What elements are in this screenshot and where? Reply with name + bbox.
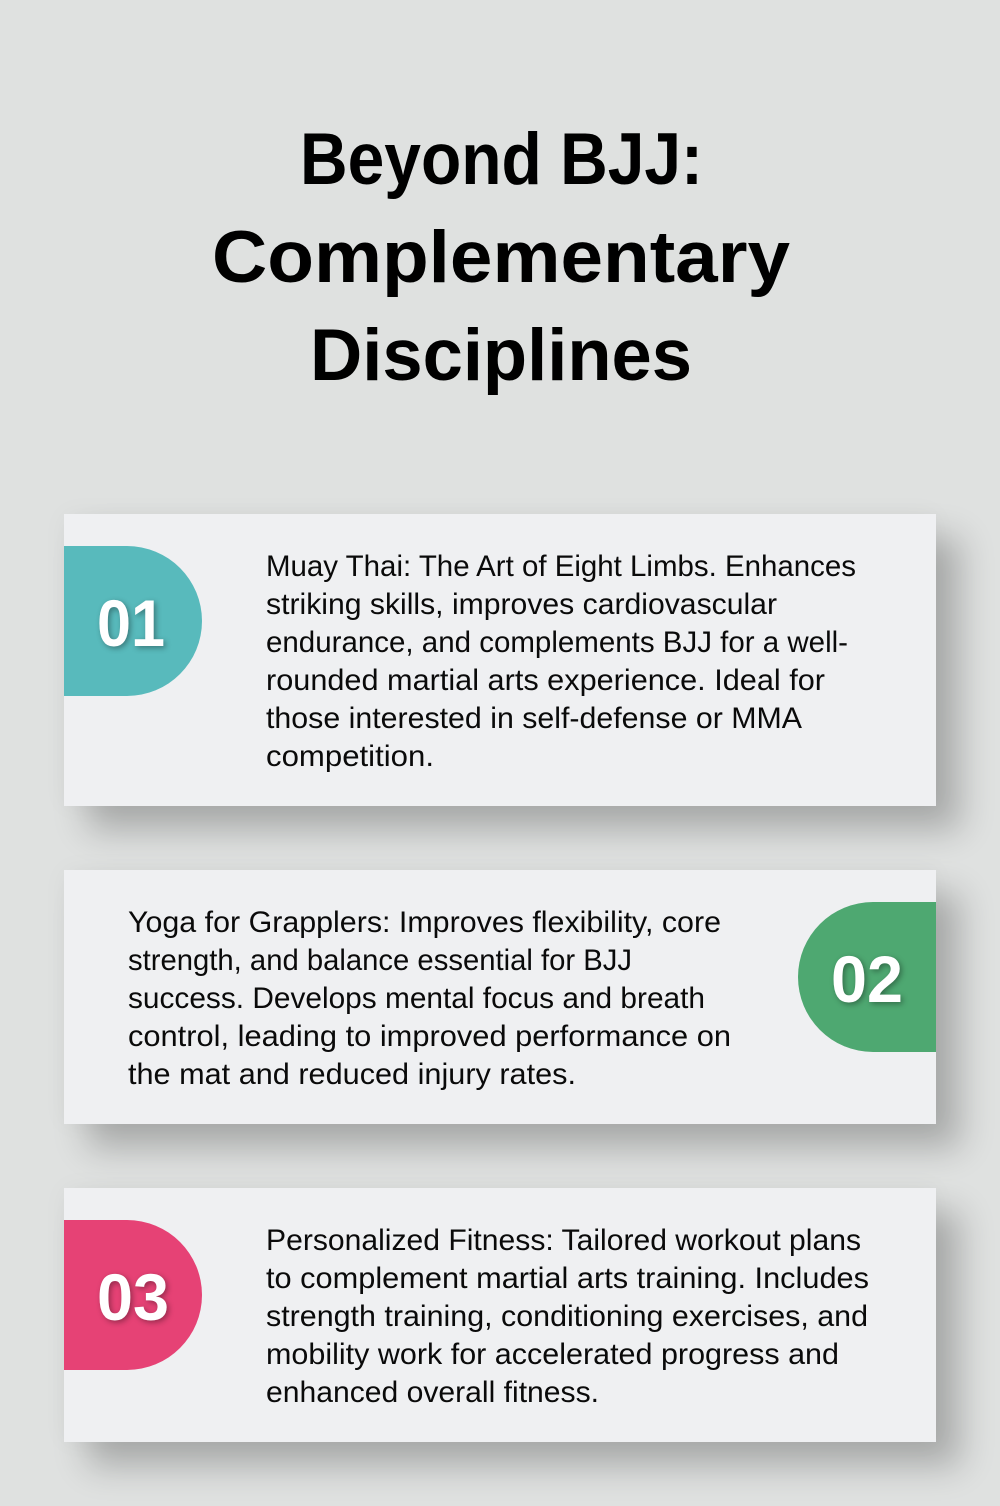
text: Personalized Fitness description: Personalized Fitness: Tailored workout plans: [266, 1224, 861, 1257]
badge: 01: 01: [97, 586, 165, 660]
badge: 02: 02: [831, 942, 903, 1016]
text: Muay Thai description: competition.: [266, 740, 434, 773]
title: Beyond BJJ:: [300, 119, 703, 200]
text: Muay Thai description: rounded martial arts experience. Ideal for: [266, 664, 825, 697]
text: Muay Thai description: Muay Thai: The Art of Eight Limbs. Enhances: [266, 550, 856, 583]
text: Yoga description: [128, 906, 731, 1091]
title: Complementary: [212, 217, 790, 298]
text: Yoga description: control, leading to improved performance on: [128, 1020, 731, 1053]
text: Muay Thai description: those interested in self-defense or MMA: [266, 702, 802, 735]
text: Muay Thai description: striking skills, improves cardiovascular: [266, 588, 777, 621]
title: [212, 119, 790, 396]
text: Muay Thai description: endurance, and complements BJJ for a well-: [266, 626, 848, 659]
badge: 02: [798, 902, 936, 1052]
text: Personalized Fitness description: enhanced overall fitness.: [266, 1376, 599, 1409]
text: Personalized Fitness description: strength training, conditioning exercises, and: [266, 1300, 868, 1333]
badge: 03: 03: [97, 1260, 169, 1334]
text: Yoga description: the mat and reduced injury rates.: [128, 1058, 576, 1091]
badge: 03: [64, 1220, 202, 1370]
text: Personalized Fitness description: to complement martial arts training. Includes: [266, 1262, 869, 1295]
title: Disciplines: [310, 315, 692, 396]
panel: Personalized Fitness: [64, 1188, 936, 1442]
text: Personalized Fitness description: mobility work for accelerated progress and: [266, 1338, 839, 1371]
text: Yoga description: success. Develops mental focus and breath: [128, 982, 705, 1015]
text: Muay Thai description: [266, 550, 856, 773]
text: Yoga description: Yoga for Grapplers: Improves flexibility, core: [128, 906, 721, 939]
text: Personalized Fitness description: [266, 1224, 869, 1409]
badge: 01: [64, 546, 202, 696]
panel: Muay Thai: [64, 514, 936, 806]
text: Yoga description: strength, and balance essential for BJJ: [128, 944, 632, 977]
panel: Yoga for Grapplers: [64, 870, 936, 1124]
